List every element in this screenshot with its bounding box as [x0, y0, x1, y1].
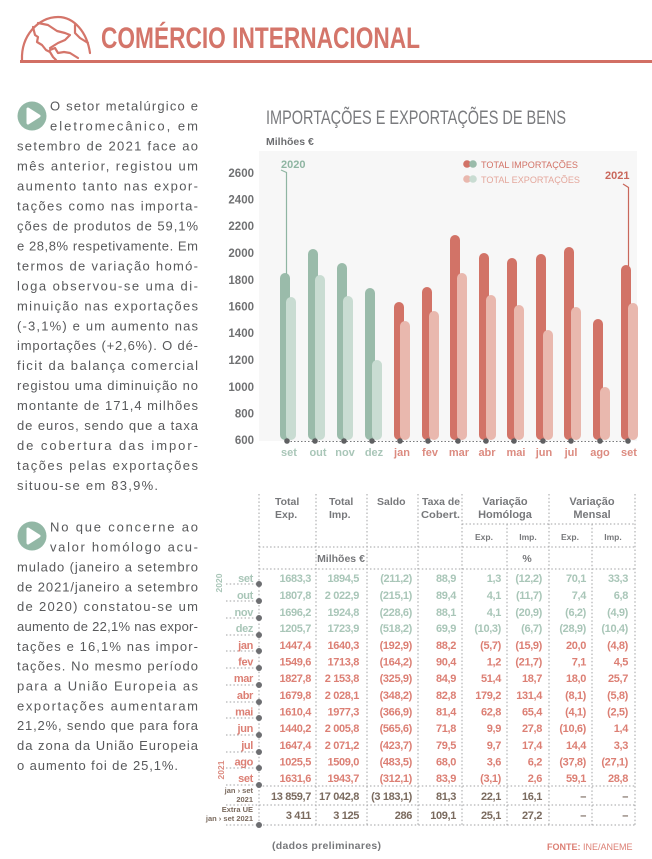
- table rows 2021: 17,4: [522, 740, 543, 752]
- text block: paragraph 1: ficit da balança comercial: [17, 358, 198, 373]
- table rows 2021: 1679,8: [279, 690, 311, 702]
- table totals: 3 411: [286, 810, 311, 822]
- table rows 2021: 9,7: [487, 740, 501, 752]
- table totals: 22,1: [481, 791, 501, 803]
- table rows 2021: jun: [237, 723, 254, 735]
- table rows 2020: 88,1: [436, 607, 456, 619]
- y axis labels: 2400: [228, 194, 254, 206]
- table rows 2020: 1723,9: [327, 623, 359, 635]
- table totals: 25,1: [481, 810, 501, 822]
- table totals: 2021: [236, 795, 253, 804]
- year labels: 2021: [216, 760, 226, 779]
- table totals: 16,1: [522, 791, 542, 803]
- table rows 2021: set: [238, 773, 254, 785]
- table rows 2020: 1,3: [487, 573, 501, 585]
- table rows 2020: (20,9): [515, 607, 543, 619]
- table totals: 286: [395, 810, 412, 822]
- text block: paragraph 2: de 2020) constatou-se um: [17, 599, 198, 614]
- x axis labels: fev: [422, 447, 439, 459]
- table totals: 17 042,8: [319, 791, 359, 803]
- table rows 2020: out: [237, 590, 254, 602]
- table rows 2021: 14,4: [566, 740, 587, 752]
- text block: paragraph 1: ções de produtos de 59,1%: [17, 218, 198, 234]
- table rows 2021: 1943,7: [327, 773, 359, 785]
- table totals: [205, 786, 628, 823]
- table rows 2020: 1205,7: [279, 623, 311, 635]
- table rows 2021: 59,1: [566, 773, 586, 785]
- table rows 2020: 4,1: [487, 590, 501, 602]
- text block: paragraph 2: No que concerne ao: [50, 520, 198, 534]
- x axis labels: nov: [335, 447, 356, 459]
- text block: paragraph 1: tações como nas importa-: [17, 198, 198, 214]
- x axis labels: mar: [449, 447, 470, 459]
- table rows 2021: (192,9): [380, 640, 413, 652]
- table rows 2021: fev: [238, 656, 254, 668]
- note: preliminary data: (dados preliminares): [272, 840, 381, 852]
- table rows 2020: 2 022,9: [325, 590, 359, 602]
- table rows 2021: 20,0: [566, 640, 586, 652]
- table rows 2021: (325,9): [380, 673, 413, 685]
- table rows 2021: (164,2): [380, 656, 413, 668]
- table rows 2021: (27,1): [601, 756, 629, 768]
- text block: paragraph 2: mulado (janeiro a setembro: [17, 560, 198, 574]
- text block: paragraph 2: exportações aumentaram: [17, 698, 198, 714]
- table rows 2021: 4,5: [614, 656, 628, 668]
- y axis labels: 2000: [228, 248, 254, 260]
- text block: paragraph 1: e 28,8% respetivamente. Em: [17, 238, 198, 254]
- table rows 2021: (2,5): [607, 706, 629, 718]
- legend: TOTAL IMPORTAÇÕES: [481, 160, 578, 171]
- table rows 2021: abr: [237, 690, 254, 702]
- text block: paragraph 2: [17, 520, 199, 773]
- text block: paragraph 1: aumento tanto nas expor-: [17, 178, 198, 194]
- table rows 2021: (348,2): [380, 690, 413, 702]
- table rows 2021: 1440,2: [279, 723, 311, 735]
- table rows 2021: ago: [234, 756, 254, 768]
- table rows 2021: 1447,4: [279, 640, 312, 652]
- table rows 2021: (21,7): [515, 656, 543, 668]
- table rows 2020: (4,9): [607, 607, 629, 619]
- table totals: –: [622, 791, 628, 803]
- table rows 2021: 81,4: [436, 706, 457, 718]
- x axis labels: mai: [507, 447, 525, 459]
- table rows 2021: 18,0: [566, 673, 586, 685]
- table rows 2021: 28,8: [608, 773, 628, 785]
- table totals: –: [580, 791, 586, 803]
- text block: paragraph 1: minuição nas exportações: [17, 298, 198, 314]
- text block: paragraph 2: tações. No mesmo período: [17, 658, 198, 674]
- text block: paragraph 2: valor homólogo acu-: [50, 540, 198, 554]
- y axis labels: 1800: [228, 275, 254, 287]
- bars 2021: [394, 235, 631, 440]
- table rows 2021: 71,8: [436, 723, 456, 735]
- text block: paragraph 1: situou-se em 83,9%.: [17, 478, 158, 493]
- table totals: jan › set 2021: [205, 814, 253, 823]
- icon: play bullet 1: [18, 102, 46, 130]
- table rows 2020: set: [238, 573, 254, 585]
- x axis labels: jul: [564, 447, 577, 459]
- table header: Taxa de: [422, 496, 460, 508]
- table rows 2020: 1807,8: [279, 590, 311, 602]
- table rows 2020: 88,9: [436, 573, 456, 585]
- table rows 2021: jan: [237, 640, 254, 652]
- table rows 2020: (10,4): [601, 623, 629, 635]
- text block: paragraph 1: mês anterior, registou um: [17, 158, 198, 174]
- x axis labels: abr: [478, 447, 496, 459]
- table header: Total: [275, 496, 299, 508]
- table header: Exp.: [561, 532, 579, 542]
- table header: %: [522, 553, 532, 565]
- table rows 2021: 27,8: [522, 723, 542, 735]
- table rows 2021: 1631,6: [279, 773, 311, 785]
- text block: paragraph 1: (-3,1%) e um aumento nas: [17, 318, 198, 334]
- table rows 2021: 1977,3: [327, 706, 359, 718]
- table rows 2021: [234, 640, 629, 785]
- header: globe icon and title: [20, 17, 652, 63]
- y axis labels: 1600: [228, 302, 254, 314]
- legend: TOTAL EXPORTAÇÕES: [481, 175, 580, 186]
- table rows 2020: 70,1: [566, 573, 586, 585]
- table rows 2021: 2 153,8: [325, 673, 359, 685]
- table totals: Extra UE: [222, 805, 253, 814]
- table rows 2021: 25,7: [608, 673, 628, 685]
- table rows 2021: 1,2: [487, 656, 501, 668]
- table header: Mensal: [573, 509, 611, 521]
- table rows 2021: 7,1: [572, 656, 586, 668]
- table rows 2021: 1827,8: [279, 673, 311, 685]
- table rows 2021: (423,7): [380, 740, 413, 752]
- table rows 2020: 4,1: [487, 607, 501, 619]
- table rows 2020: dez: [236, 623, 254, 635]
- text block: paragraph 2: para a União Europeia as: [17, 678, 198, 694]
- y axis labels: 1400: [228, 328, 254, 340]
- table rows 2021: 3,6: [487, 756, 501, 768]
- text block: paragraph 2: de 2021/janeiro a setembro: [17, 580, 198, 594]
- table rows 2021: 88,2: [436, 640, 456, 652]
- table totals: 3 125: [333, 810, 359, 822]
- icon: globe: [22, 17, 90, 60]
- callout: 2021: 2021: [605, 170, 629, 182]
- table rows 2021: (5,7): [480, 640, 502, 652]
- bar chart: [228, 151, 638, 459]
- table rows 2020: (12,2): [515, 573, 543, 585]
- table rows 2021: 1025,5: [279, 756, 311, 768]
- x axis labels: [281, 447, 637, 459]
- table rows 2020: nov: [234, 607, 254, 619]
- table rows 2020: 6,8: [614, 590, 628, 602]
- chart unit label: Milhões €: [266, 136, 314, 148]
- table rows 2021: 2,6: [528, 773, 542, 785]
- table totals: (3 183,1): [371, 791, 413, 803]
- text block: paragraph 1: de cobertura das impor-: [17, 438, 198, 453]
- table rows 2021: mar: [234, 673, 254, 685]
- legend: [463, 160, 580, 186]
- callout: 2020: 2020: [281, 159, 305, 171]
- table rows 2020: (215,1): [380, 590, 413, 602]
- table rows 2021: 18,7: [522, 673, 542, 685]
- y axis labels: 2200: [228, 221, 254, 233]
- table header: [275, 496, 622, 565]
- table rows 2021: 3,3: [614, 740, 628, 752]
- table header: Imp.: [604, 532, 622, 542]
- table rows 2021: 6,2: [528, 756, 542, 768]
- table rows 2020: 33,3: [608, 573, 628, 585]
- table header: Exp.: [275, 509, 297, 521]
- table header: Total: [329, 496, 353, 508]
- table header: Exp.: [475, 532, 493, 542]
- callout: 2020: [281, 159, 305, 274]
- table rows 2020: 1924,8: [327, 607, 359, 619]
- text block: paragraph 2: 21,2%, sendo que para fora: [17, 718, 199, 733]
- table rows 2021: 1640,3: [327, 640, 359, 652]
- table rows 2020: (10,3): [474, 623, 502, 635]
- table rows 2021: (4,8): [607, 640, 629, 652]
- x axis labels: dez: [365, 447, 384, 459]
- table rows 2021: 62,8: [481, 706, 501, 718]
- table rows 2021: mai: [235, 706, 253, 718]
- title text: COMÉRCIO INTERNACIONAL: [101, 21, 420, 55]
- text block: paragraph 1: termos de variação homó-: [17, 258, 198, 274]
- table header: Variação: [482, 496, 528, 508]
- table rows 2021: 65,4: [522, 706, 543, 718]
- table rows 2021: 1610,4: [279, 706, 312, 718]
- table totals: –: [580, 810, 586, 822]
- year labels: [214, 573, 226, 779]
- callout: 2021: [605, 170, 629, 266]
- table rows 2021: (3,1): [480, 773, 502, 785]
- table rows 2020: 89,4: [436, 590, 457, 602]
- x axis labels: set: [281, 447, 297, 459]
- bars 2020: [280, 249, 375, 440]
- text block: paragraph 1: eletromecânico, em: [50, 118, 198, 134]
- y axis labels: 2600: [228, 168, 254, 180]
- text block: paragraph 1: loga observou-se uma di-: [17, 278, 198, 294]
- y axis labels: 600: [235, 435, 254, 447]
- text block: paragraph 1: setembro de 2021 face ao: [17, 138, 198, 154]
- text block: paragraph 1: montante de 171,4 milhões: [17, 398, 198, 413]
- y axis labels: 800: [235, 408, 254, 420]
- table rows 2020: [234, 573, 629, 635]
- table rows 2021: 1647,4: [279, 740, 312, 752]
- table rows 2021: (483,5): [380, 756, 413, 768]
- table header: Cobert.: [421, 509, 460, 521]
- table rows 2021: 179,2: [475, 690, 501, 702]
- table rows 2021: (8,1): [565, 690, 587, 702]
- table rows 2021: (37,8): [559, 756, 587, 768]
- text block: paragraph 2: da zona da União Europeia: [17, 738, 199, 753]
- text block: paragraph 1: tações pelas exportações: [17, 458, 198, 473]
- table rows 2021: 79,5: [436, 740, 456, 752]
- table rows 2020: (6,2): [565, 607, 587, 619]
- table rows 2021: 90,4: [436, 656, 457, 668]
- text block: paragraph 1: registou uma diminuição no: [17, 378, 198, 393]
- table header: Milhões €: [317, 553, 365, 565]
- table rows 2021: 1,4: [614, 723, 629, 735]
- y axis labels: [228, 168, 254, 447]
- icon: play bullet 2: [18, 522, 46, 550]
- table rows 2021: jul: [240, 740, 253, 752]
- table rows 2020: (28,9): [559, 623, 587, 635]
- table header: Imp.: [329, 509, 351, 521]
- text block: paragraph 1: de euros, sendo que a taxa: [17, 418, 199, 433]
- table rows 2020: 69,9: [436, 623, 456, 635]
- table rows 2021: 131,4: [516, 690, 543, 702]
- x axis labels: jan: [393, 447, 410, 459]
- table rows 2020: 1683,3: [279, 573, 311, 585]
- x axis labels: ago: [590, 447, 610, 459]
- table rows 2021: 83,9: [436, 773, 456, 785]
- table totals: 27,2: [522, 810, 542, 822]
- data table: [205, 494, 635, 828]
- table rows 2021: (565,6): [380, 723, 413, 735]
- table rows 2021: 82,8: [436, 690, 456, 702]
- text block: paragraph 1: O setor metalúrgico e: [50, 98, 198, 114]
- table header: Imp.: [519, 532, 537, 542]
- table totals: jan › set: [224, 786, 253, 795]
- table grid: [226, 494, 635, 827]
- table rows 2020: (518,2): [380, 623, 413, 635]
- table rows 2021: 1549,6: [279, 656, 311, 668]
- year labels: 2020: [214, 573, 224, 592]
- table rows 2021: 51,4: [481, 673, 502, 685]
- table rows 2020: 7,4: [572, 590, 587, 602]
- table header: Homóloga: [478, 509, 533, 521]
- text block: paragraph 2: o aumento foi de 25,1%.: [17, 758, 178, 773]
- table header: Variação: [569, 496, 615, 508]
- table rows 2021: 1509,0: [327, 756, 359, 768]
- table rows 2020: (11,7): [516, 590, 543, 602]
- table rows 2021: (10,6): [559, 723, 587, 735]
- table rows 2021: (312,1): [380, 773, 413, 785]
- table rows 2021: (5,8): [607, 690, 629, 702]
- table rows 2020: (228,6): [380, 607, 413, 619]
- text block: paragraph 1: [17, 98, 199, 493]
- table rows 2021: (366,9): [380, 706, 413, 718]
- source: FONTE: INE/ANEME: [547, 842, 633, 852]
- x axis labels: set: [621, 447, 637, 459]
- table totals: 13 859,7: [271, 791, 311, 803]
- table rows 2021: 84,9: [436, 673, 456, 685]
- table rows 2020: 1894,5: [327, 573, 359, 585]
- text block: paragraph 1: importações (+2,6%). O dé-: [17, 338, 198, 353]
- table rows 2020: 1696,2: [279, 607, 311, 619]
- text block: paragraph 2: aumento de 22,1% nas expor-: [17, 619, 198, 634]
- table rows 2021: (4,1): [565, 706, 587, 718]
- table rows 2021: 2 028,1: [325, 690, 359, 702]
- y axis labels: 1000: [228, 382, 254, 394]
- x axis labels: out: [309, 447, 327, 459]
- table totals: 109,1: [430, 810, 456, 822]
- table rows 2020: (211,2): [380, 573, 413, 585]
- table header: Saldo: [377, 496, 406, 508]
- table rows 2021: 1713,8: [327, 656, 359, 668]
- table rows 2021: (15,9): [515, 640, 543, 652]
- table rows 2021: 2 071,2: [325, 740, 359, 752]
- table totals: –: [622, 810, 628, 822]
- x axis labels: jun: [535, 447, 553, 459]
- table rows 2021: 9,9: [487, 723, 501, 735]
- table totals: 81,3: [436, 791, 456, 803]
- text block: paragraph 2: tações e 16,1% nas impor-: [17, 639, 198, 654]
- table rows 2021: 68,0: [436, 756, 456, 768]
- table rows 2021: 2 005,8: [325, 723, 359, 735]
- y axis labels: 1200: [228, 355, 254, 367]
- table rows 2020: (6,7): [521, 623, 543, 635]
